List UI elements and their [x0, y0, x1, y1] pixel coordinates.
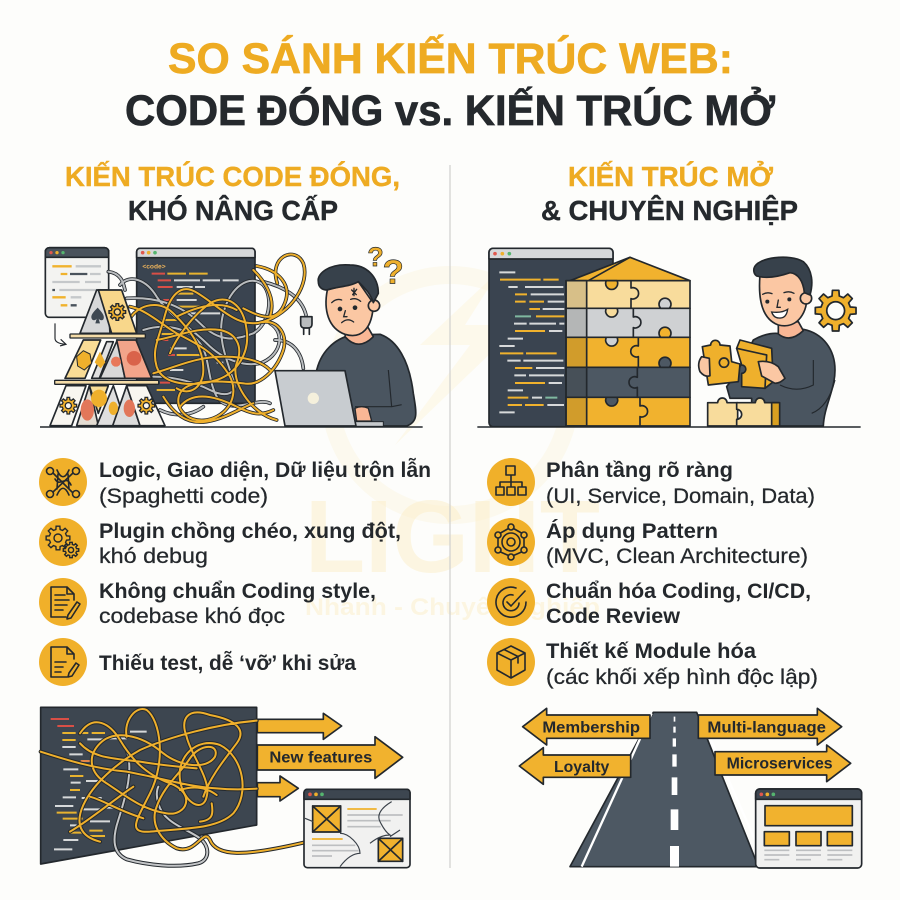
cracked browser window [304, 789, 410, 868]
benefit 1 [487, 458, 815, 508]
problem 2: khó debug [99, 544, 208, 568]
benefit 1: (UI, Service, Domain, Data) [546, 484, 815, 508]
illustration: tangled code blocks new features [41, 707, 410, 868]
problem 3 [39, 578, 376, 628]
watermark: Nhanh - Chuyên nghiệp [305, 594, 600, 621]
problem 4 [39, 638, 357, 686]
sign: loyalty: Loyalty [554, 759, 609, 776]
tangled cables [108, 254, 306, 422]
watermark: LIGHT [305, 479, 600, 594]
puzzle pieces on table [708, 398, 780, 426]
problem 4: Thiếu test, dễ ‘vỡ’ khi sửa [99, 650, 357, 675]
modular browser window [756, 789, 862, 868]
sign: multi-language [698, 708, 842, 745]
question marks: ? [367, 242, 384, 272]
developer: confused [316, 265, 416, 426]
benefit 3: Code Review [546, 604, 680, 628]
problem 1 [39, 457, 431, 508]
icon: layered hierarchy [487, 458, 535, 506]
dark code panel [41, 707, 257, 864]
code window [137, 248, 255, 403]
puzzle tower [566, 281, 690, 426]
title: SO SÁNH KIẾN TRÚC WEB: [168, 34, 733, 83]
laptop [275, 371, 356, 426]
heading: open architecture: & CHUYÊN NGHIỆP [541, 195, 798, 226]
watermark [305, 270, 600, 621]
roof [570, 257, 690, 281]
arrow: new features [257, 737, 403, 778]
illustration: puzzle tower and happy developer [477, 248, 861, 427]
heading: closed code architecture: KIẾN TRÚC CODE ĐÓNG, [65, 161, 400, 192]
puzzle pieces in hands [699, 340, 785, 388]
illustration: open road with feature signs [519, 708, 862, 868]
tangled cables [41, 709, 303, 866]
sign: microservices: Microservices [727, 756, 833, 773]
code window [489, 248, 613, 427]
title: CODE ĐÓNG vs. KIẾN TRÚC MỞ [125, 86, 775, 135]
benefit 4 [487, 638, 818, 689]
arrow: new features: New features [269, 750, 372, 767]
heading: open architecture: KIẾN TRÚC MỞ [568, 160, 774, 192]
problem 1: (Spaghetti code) [99, 484, 268, 508]
ground line [477, 425, 861, 429]
house of cards [50, 290, 165, 426]
plug [301, 317, 312, 334]
sign: membership: Membership [542, 719, 640, 736]
heading: closed code architecture: KHÓ NÂNG CẤP [128, 195, 338, 226]
arrow: window to cards [55, 323, 66, 346]
benefit 2: (MVC, Clean Architecture) [546, 544, 808, 568]
benefit 2 [487, 518, 808, 568]
problem 1: Logic, Giao diện, Dữ liệu trộn lẫn [99, 457, 431, 482]
ground line [40, 425, 423, 429]
problem 3: codebase khó đọc [99, 604, 285, 628]
question marks [367, 242, 404, 291]
benefit 2: Áp dụng Pattern [546, 518, 718, 543]
benefit 4: (các khối xếp hình độc lập) [546, 665, 818, 689]
benefit 3: Chuẩn hóa Coding, CI/CD, [546, 579, 811, 603]
heading: closed code architecture [65, 161, 400, 226]
heading: open architecture [541, 160, 798, 226]
road [570, 712, 758, 867]
icon: module box [487, 638, 535, 686]
illustration: tangled code, house of cards and stressed developer [40, 242, 423, 427]
icon: pattern nodes [487, 518, 535, 566]
code window: <code> [142, 264, 166, 271]
developer: happy [727, 257, 835, 426]
sign: loyalty [519, 748, 631, 784]
problem 2 [39, 518, 401, 568]
benefit 1: Phân tầng rõ ràng [546, 458, 733, 482]
icon: target check [487, 578, 535, 626]
benefit 3 [487, 578, 811, 628]
gear icon [815, 290, 856, 331]
icon: document with pencil [39, 638, 87, 686]
benefit 4: Thiết kế Module hóa [546, 639, 757, 663]
arrow 1 [257, 713, 342, 739]
question marks: ? [383, 253, 404, 291]
icon: spaghetti network [39, 458, 87, 506]
arrow 3 [257, 776, 298, 801]
title [125, 34, 775, 135]
problem 2: Plugin chồng chéo, xung đột, [99, 519, 401, 543]
small browser window [45, 248, 109, 317]
center divider [449, 165, 451, 868]
sign: membership [523, 708, 650, 745]
sign: microservices [715, 745, 851, 782]
icon: gears [39, 518, 87, 566]
problem 3: Không chuẩn Coding style, [99, 579, 376, 603]
icon: document with pen [39, 578, 87, 626]
sign: multi-language: Multi-language [707, 719, 826, 736]
